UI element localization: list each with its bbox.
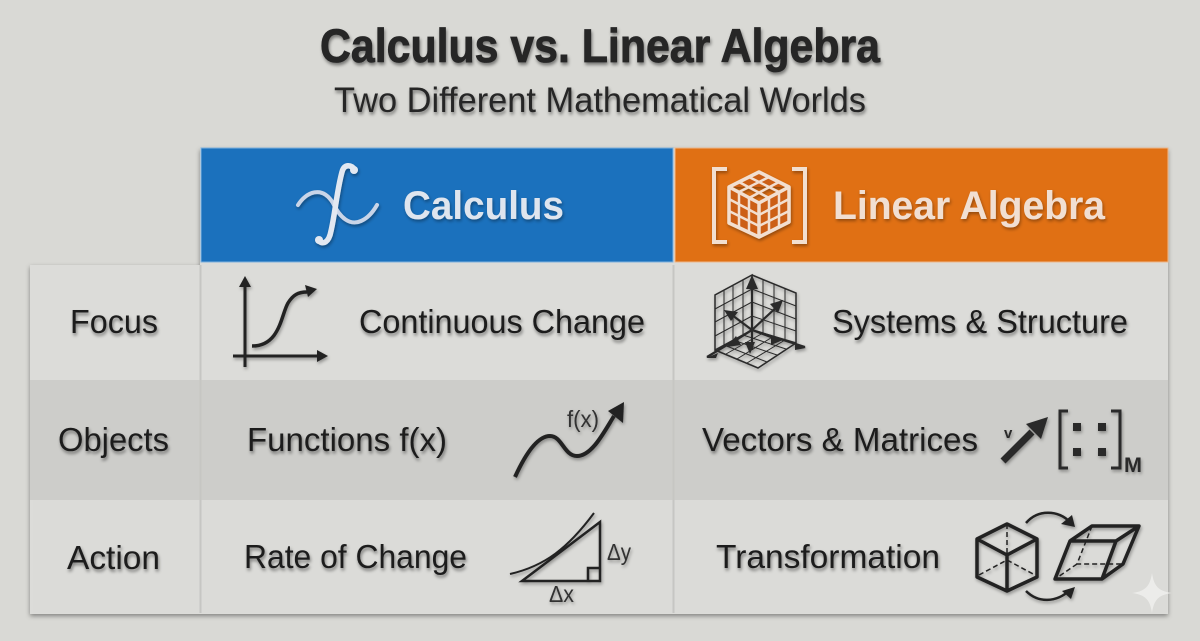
icon: bracketed cube <box>714 169 805 242</box>
cell: functions <box>247 402 624 477</box>
text: functions f(x): Functions f(x) <box>247 421 447 458</box>
header label: calculus: Calculus <box>403 184 564 228</box>
text: vectors and matrices: Vectors & Matrices <box>702 421 978 458</box>
subtitle: Two Different Mathematical Worlds <box>334 81 866 120</box>
icon: s-curve on axes <box>233 276 328 367</box>
text: rate of change: Rate of Change <box>244 538 467 575</box>
cell: rate of change <box>244 513 631 607</box>
header: linear algebra <box>675 148 1168 262</box>
icon: slope triangle: Δy <box>607 539 631 565</box>
text: continuous change: Continuous Change <box>359 303 645 340</box>
text: transformation: Transformation <box>716 538 940 575</box>
header: calculus <box>201 148 673 262</box>
cell: vectors and matrices <box>702 411 1142 477</box>
comparison table <box>30 148 1168 614</box>
row labels <box>58 303 169 576</box>
label: focus: Focus <box>70 303 158 340</box>
label: action: Action <box>67 539 160 576</box>
icon: vector and matrix: v <box>1004 425 1013 442</box>
cell: systems and structure <box>706 275 1128 368</box>
title: Calculus vs. Linear Algebra <box>320 19 881 72</box>
icon: cube transforming <box>977 513 1139 600</box>
row: action background <box>33 500 1167 613</box>
icon: vector and matrix <box>1003 411 1142 477</box>
icon: slope triangle <box>510 513 631 607</box>
icon: rising function curve: f(x) <box>567 406 599 432</box>
cell: continuous change <box>233 276 645 367</box>
table body panel <box>30 148 1168 614</box>
text: systems and structure: Systems & Structure <box>832 303 1128 340</box>
icon: vector and matrix: M <box>1124 454 1142 477</box>
icon: slope triangle: Δx <box>549 581 574 607</box>
icon: sparkle watermark <box>1132 573 1172 613</box>
icon: integral and wave <box>298 166 377 244</box>
icon: rising function curve <box>515 402 624 477</box>
header label: linear algebra: Linear Algebra <box>833 184 1106 228</box>
label: objects: Objects <box>58 421 169 458</box>
row: focus background <box>32 265 1168 380</box>
row: objects background <box>30 380 1168 500</box>
icon: 3d grid with vectors <box>706 275 806 368</box>
cell: transformation <box>716 513 1139 600</box>
